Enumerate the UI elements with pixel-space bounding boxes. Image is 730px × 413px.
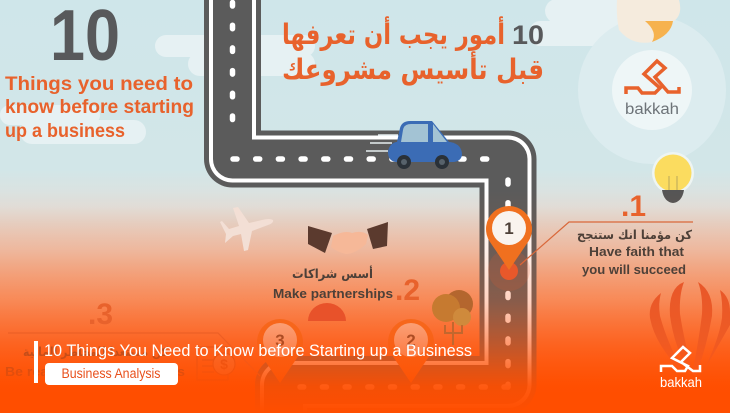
map pin 3: 3	[275, 331, 285, 350]
icon: trees	[432, 290, 473, 345]
logo badge: bakkah	[612, 50, 692, 130]
step 3: text block: Be ready for financial risks	[5, 364, 185, 379]
step 1: text block: Have faith that	[589, 244, 685, 259]
step 1: text block	[520, 190, 693, 277]
icon: money document: $	[220, 356, 228, 372]
step 3: text block: كن مستعدا للمخاطر المالية	[23, 344, 169, 359]
halo behind logo	[578, 16, 726, 164]
heading: English title: Things you need to	[5, 73, 193, 95]
logo: white bakkah: bakkah	[660, 374, 702, 390]
clouds	[0, 0, 680, 144]
step 1: text block: كن مؤمنا انك ستنجح	[577, 227, 693, 242]
category tag	[45, 363, 178, 385]
icon: light bulb	[652, 152, 694, 203]
step 3: number: .3	[88, 298, 113, 331]
map pin 1: 1	[504, 219, 514, 238]
heading: English title: up a business	[5, 120, 125, 142]
step 2: text block: أسس شراكات	[292, 265, 373, 281]
map pin 1	[486, 206, 532, 291]
icon: hot air balloon	[650, 282, 730, 376]
map pin 3	[257, 319, 303, 383]
icon: money document	[197, 347, 235, 380]
icon: airplane	[220, 207, 273, 251]
title accent bar	[34, 341, 38, 383]
step 1: text block: .1	[621, 190, 646, 223]
heading: Arabic title: أمور يجب أن تعرفها	[282, 16, 505, 51]
step 2: text block: Make partnerships	[273, 286, 393, 301]
heading: Arabic title	[282, 16, 544, 86]
icon: dome	[308, 303, 346, 321]
icon: handshake	[308, 222, 388, 254]
sun behind cloud	[617, 0, 680, 43]
article title: 10 Things You Need to Know before Starting up a Business	[44, 341, 472, 360]
category tag: Business Analysis	[62, 366, 161, 381]
map pin 2: 2	[406, 331, 416, 350]
map pin 2	[388, 319, 434, 383]
logo: white bakkah	[660, 347, 702, 390]
road	[232, 0, 508, 413]
orange fade overlay	[0, 190, 730, 413]
logo badge: bakkah: bakkah	[625, 101, 679, 118]
step 2: text block	[273, 265, 420, 307]
step 1: text block: you will succeed	[582, 262, 686, 277]
heading: Arabic title: قبل تأسيس مشروعك	[282, 51, 544, 86]
heading: English title	[5, 73, 194, 142]
step 3: text block	[5, 333, 260, 379]
heading: English title: know before starting	[5, 96, 194, 118]
heading: Arabic title: 10	[512, 20, 544, 50]
step 2: text block: .2	[395, 274, 420, 307]
car	[366, 121, 462, 169]
